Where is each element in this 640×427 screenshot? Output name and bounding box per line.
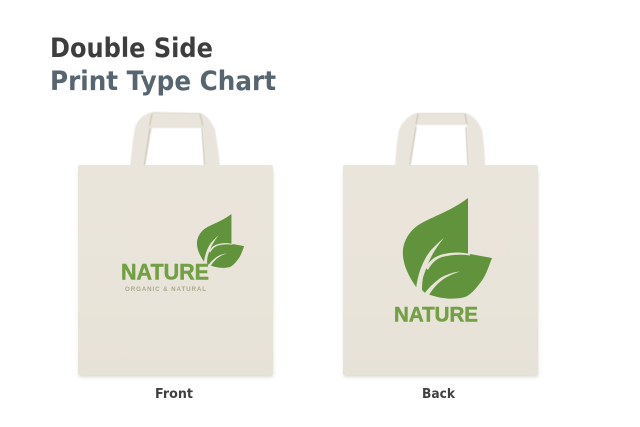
front logo [121,214,244,293]
back bag handle [395,113,485,166]
title [50,33,276,97]
front tote bag [78,112,273,377]
front logo wordmark: NATURE [121,260,209,284]
label: Front: Front [155,386,194,402]
back logo wordmark: NATURE [394,302,478,326]
front bag handle [130,112,220,166]
title line: Print Type Chart: Print Type Chart [50,66,276,97]
icon: front leaves [197,214,244,268]
back logo [394,198,492,326]
icon: back leaves [403,198,492,299]
back bag shadow [344,170,538,377]
title line: Double Side: Double Side [50,33,213,64]
back tote bag [343,113,538,377]
front logo tagline: ORGANIC & NATURAL [125,286,206,293]
back bag body [343,165,538,375]
label: Back: Back [422,386,456,402]
front bag shadow [79,170,273,377]
front bag body [78,165,273,375]
